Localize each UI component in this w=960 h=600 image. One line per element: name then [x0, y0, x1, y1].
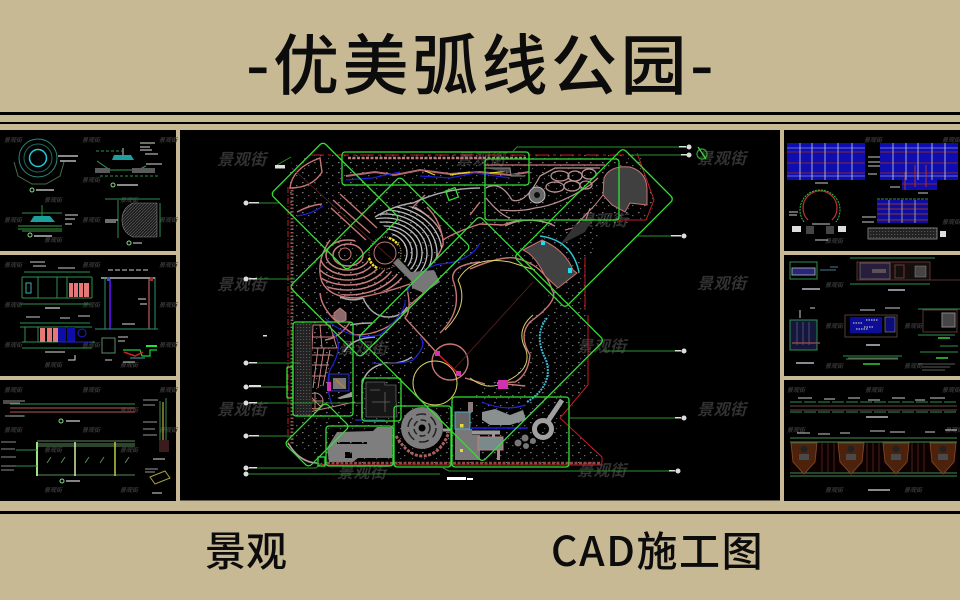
panel: right sheet 3, screen wall: [784, 380, 960, 501]
gate plaza: [334, 308, 346, 322]
small watermarks: 景观街: [904, 361, 923, 370]
crescent plaza: [523, 240, 577, 288]
planter detail: [123, 346, 157, 358]
small watermarks: 景观街: [44, 360, 63, 369]
small watermarks: 景观街: [4, 215, 23, 224]
small watermarks: 景观街: [82, 425, 101, 434]
small watermarks: 景观街: [82, 135, 101, 144]
watermarks: 景观街: [338, 335, 390, 359]
pool plan d: [845, 308, 900, 345]
watermarks: 景观街: [578, 207, 630, 231]
small watermarks: 景观街: [942, 385, 960, 394]
small watermarks: 景观街: [159, 385, 178, 394]
small amphitheatre ring: [339, 248, 351, 260]
watermarks: 景观街: [337, 459, 389, 483]
leader markers: [244, 144, 692, 476]
small watermarks: 景观街: [4, 300, 23, 309]
dark red diagonal: [292, 168, 533, 368]
small watermarks: 景观街: [82, 215, 101, 224]
small watermarks: 景观街: [159, 340, 178, 349]
watermarks: [217, 145, 749, 483]
watermarks: 景观街: [577, 457, 629, 481]
canopy elevation: [862, 199, 946, 239]
wall elevation: [1, 441, 135, 483]
small watermarks: 景观街: [825, 485, 844, 494]
pavilion elevation: [18, 205, 78, 237]
small watermarks: 景观街: [44, 485, 63, 494]
small watermarks: 景观街: [120, 445, 139, 454]
east walk: [565, 195, 603, 230]
plan a: [790, 262, 838, 289]
grey plaza: [393, 258, 440, 293]
footing detail: [102, 337, 135, 362]
lower plan: [20, 316, 95, 360]
small watermarks: [825, 280, 923, 370]
small watermarks: 景观街: [44, 235, 63, 244]
small watermarks: 景观街: [44, 195, 63, 204]
title: -优美弧线公园-: [246, 13, 717, 109]
small watermarks: 景观街: [787, 385, 806, 394]
boundary ladder strip: [290, 190, 294, 445]
stage clearing: [345, 205, 398, 272]
watermarks: 景观街: [697, 145, 749, 169]
small watermarks: 景观街: [825, 236, 844, 245]
site boundary: [288, 153, 654, 465]
south garden: [455, 400, 562, 460]
watermarks: 景观街: [577, 333, 629, 357]
fountain: [529, 187, 545, 203]
magenta pavilions: [435, 351, 508, 389]
footer label: CAD construction drawings: CAD施工图: [551, 518, 764, 578]
section c: [790, 308, 820, 363]
panel: left sheet 3, wall elevation: [0, 380, 178, 501]
small watermarks: 景观街: [4, 135, 23, 144]
grey walkways: [288, 188, 480, 463]
small watermarks: 景观街: [44, 445, 63, 454]
lower amphitheatre: [320, 239, 402, 296]
salmon panels lower: [40, 328, 58, 342]
small watermarks: 景观街: [904, 485, 923, 494]
small watermarks: 景观街: [825, 361, 844, 370]
small watermarks: 景观街: [82, 260, 101, 269]
small watermarks: 景观街: [120, 405, 139, 414]
small watermarks: 景观街: [4, 260, 23, 269]
blue water edges: [297, 206, 525, 420]
watermarks: 景观街: [217, 271, 269, 295]
small watermarks: [4, 385, 178, 494]
heart ornaments: [791, 443, 956, 474]
central lake: [400, 258, 552, 408]
small watermarks: 景观街: [942, 135, 960, 144]
upper amphitheatre: [375, 206, 442, 272]
CAD drawing sheets: [0, 130, 960, 501]
watermarks: 景观街: [458, 271, 510, 295]
west hatch strip: [295, 323, 312, 415]
leader lines: [245, 147, 688, 474]
small watermarks: 景观街: [4, 340, 23, 349]
panel: right sheet 2, water feature: [784, 255, 960, 376]
west grid garden: [296, 325, 355, 415]
cyan markers: [541, 241, 572, 273]
column detail: [143, 398, 169, 459]
upper plan: [20, 262, 92, 308]
detail f: [918, 309, 960, 370]
small watermarks: 景观街: [825, 321, 844, 330]
small watermarks: 景观街: [825, 280, 844, 289]
watermarks: 景观街: [697, 270, 749, 294]
small watermarks: 景观街: [4, 385, 23, 394]
watermarks: 景观街: [217, 146, 269, 170]
panel: main site plan: [180, 130, 780, 500]
small watermarks: 景观街: [82, 175, 101, 184]
small watermarks: 景观街: [159, 425, 178, 434]
cyan stream: [527, 318, 548, 402]
watermarks: 景观街: [697, 396, 749, 420]
small watermarks: 景观街: [120, 195, 139, 204]
footer label: landscape: 景观: [205, 518, 287, 578]
small watermarks: 景观街: [120, 360, 139, 369]
small watermarks: 景观街: [787, 425, 806, 434]
small watermarks: 景观街: [159, 135, 178, 144]
small watermarks: 景观街: [120, 485, 139, 494]
panel: right sheet 1, canopy: [784, 130, 960, 251]
upper right garden cells: [485, 165, 605, 226]
pavilion section: [95, 143, 162, 187]
canopy plans: [787, 143, 958, 193]
red axis: [437, 353, 458, 373]
small watermarks: 景观街: [82, 340, 101, 349]
small watermarks: [825, 135, 960, 245]
ornament plaques: [799, 446, 948, 460]
dotted stage ring: [369, 237, 401, 269]
small watermarks: 景观街: [159, 260, 178, 269]
top planting strip: [346, 158, 529, 180]
panel: left sheet 2, shelter: [0, 255, 178, 376]
green zone frames: [271, 142, 674, 468]
cyan crescent: [540, 236, 579, 272]
site land with planting dots: [290, 155, 656, 463]
base detail: [145, 469, 170, 493]
small watermarks: [4, 260, 178, 369]
side elevation e: [843, 356, 902, 364]
round plan: [14, 139, 78, 192]
hatched plan: [105, 199, 160, 245]
compound block: [366, 382, 397, 417]
wall elevation: [790, 430, 957, 490]
small watermarks: 景观街: [159, 300, 178, 309]
wall plan: [790, 398, 957, 417]
small watermarks: 景观街: [942, 217, 960, 226]
pathway network: [290, 158, 554, 386]
south wall strip: [327, 462, 602, 464]
arch section: [789, 190, 846, 240]
grey building complex: [327, 427, 392, 462]
panel: left sheet 1, round pavilion: [0, 130, 178, 251]
watermarks: 景观街: [217, 396, 269, 420]
watermarks: 景观街: [456, 146, 508, 170]
round plaza: [396, 407, 452, 456]
salmon panels upper: [69, 283, 89, 297]
small watermarks: [787, 385, 960, 494]
small watermarks: 景观街: [865, 385, 884, 394]
blue panels: [58, 327, 92, 342]
yellow lake outlines: [413, 260, 535, 405]
small watermarks: 景观街: [82, 385, 101, 394]
wall plan: [3, 401, 135, 423]
plaza building: [327, 374, 352, 399]
small watermarks: 景观街: [82, 300, 101, 309]
small watermarks: 景观街: [904, 321, 923, 330]
small watermarks: 景观街: [4, 425, 23, 434]
scale bar: [447, 477, 473, 480]
small watermarks: 景观街: [864, 135, 883, 144]
elevation b: [850, 258, 960, 290]
east plaza: [603, 167, 647, 212]
gate elevation: [95, 270, 158, 329]
north arrow: [697, 147, 707, 159]
small watermarks: 景观街: [159, 215, 178, 224]
yellow stage arcs: [369, 238, 398, 268]
small watermarks: [4, 135, 178, 244]
